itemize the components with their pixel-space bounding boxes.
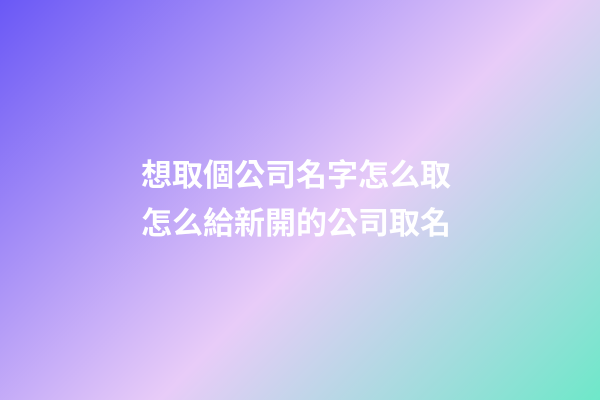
title line 2: 怎么給新開的公司取名 [141,206,451,241]
title line 1: 想取個公司名字怎么取 [141,158,451,193]
title [141,158,451,241]
